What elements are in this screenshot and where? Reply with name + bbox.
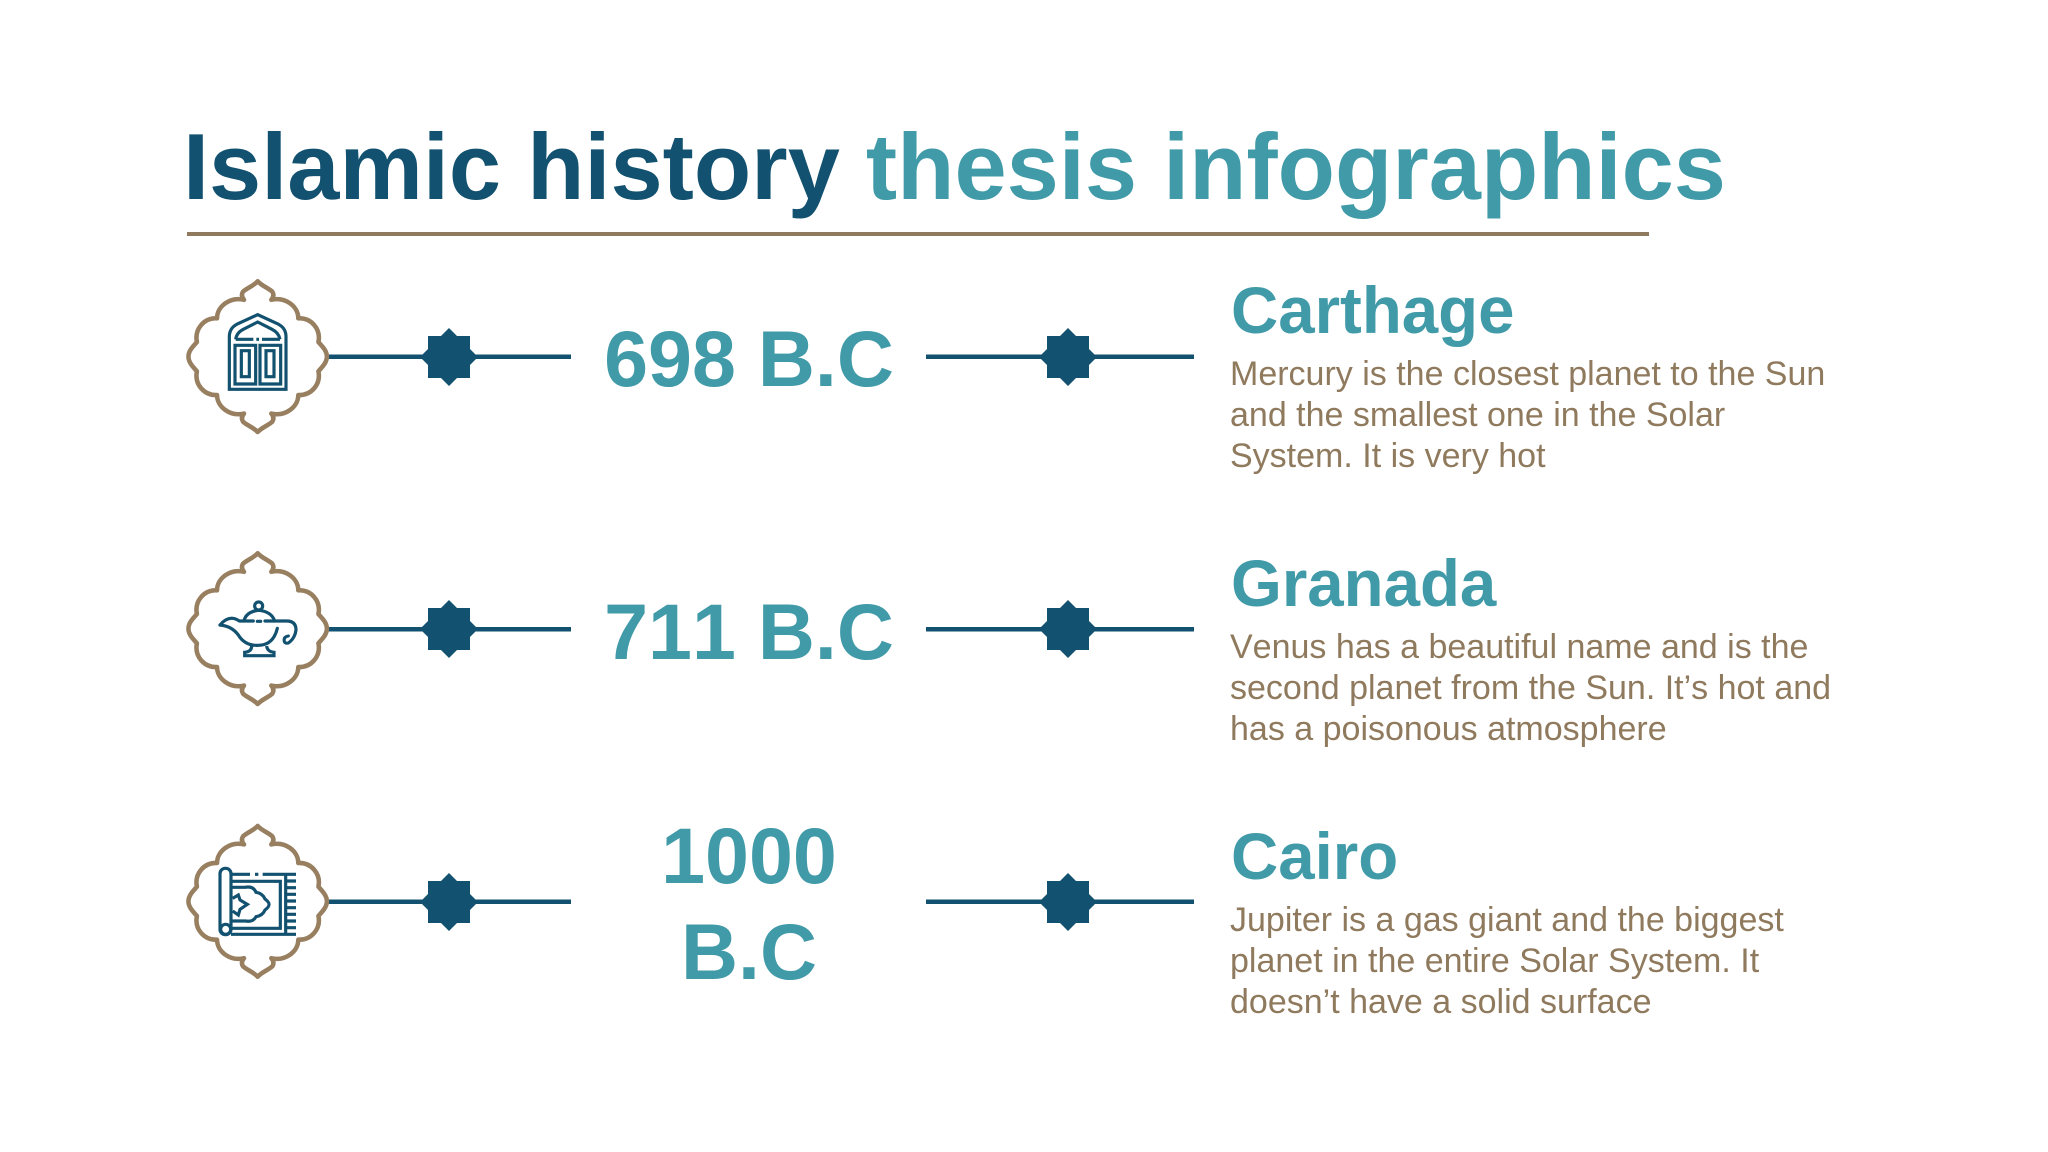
icon: lamp in ornate frame xyxy=(188,553,327,704)
description Granada: Venus has a beautiful name and is the xyxy=(1230,628,1808,666)
description Cairo: Jupiter is a gas giant and the biggest xyxy=(1230,901,1784,939)
star marker right row 3 xyxy=(1039,873,1097,931)
row 1: Carthage xyxy=(188,274,1825,475)
heading Granada: Granada xyxy=(1231,547,1497,620)
icon: carpet in ornate frame xyxy=(188,826,327,977)
star marker right row 1 xyxy=(1039,328,1097,386)
title underline xyxy=(187,232,1649,236)
description Cairo: doesn’t have a solid surface xyxy=(1230,983,1651,1021)
description Carthage: Mercury is the closest planet to the Sun xyxy=(1230,355,1825,393)
description Carthage: and the smallest one in the Solar xyxy=(1230,396,1725,434)
star marker left row 1 xyxy=(420,328,478,386)
date 1000 B.C: 1000 xyxy=(661,811,837,900)
star marker right row 2 xyxy=(1039,600,1097,658)
description Granada: second planet from the Sun. It’s hot and xyxy=(1230,669,1831,707)
heading Cairo: Cairo xyxy=(1231,820,1398,893)
date 1000 B.C: B.C xyxy=(681,907,817,996)
title: Islamic history thesis infographics xyxy=(183,114,1726,219)
connector lines row 1 xyxy=(328,354,1194,359)
icon: door in ornate frame xyxy=(188,281,327,432)
description Cairo: planet in the entire Solar System. It xyxy=(1230,942,1760,980)
row 3: Cairo xyxy=(188,811,1784,1021)
date 711 B.C: 711 B.C xyxy=(604,587,894,676)
heading Carthage: Carthage xyxy=(1231,274,1514,347)
star marker left row 3 xyxy=(420,873,478,931)
connector lines row 2 xyxy=(328,627,1194,632)
star marker left row 2 xyxy=(420,600,478,658)
connector lines row 3 xyxy=(328,900,1194,904)
description Carthage: System. It is very hot xyxy=(1230,437,1546,475)
row 2: Granada xyxy=(188,547,1831,748)
description Granada: has a poisonous atmosphere xyxy=(1230,710,1667,748)
date 698 B.C: 698 B.C xyxy=(604,314,894,403)
